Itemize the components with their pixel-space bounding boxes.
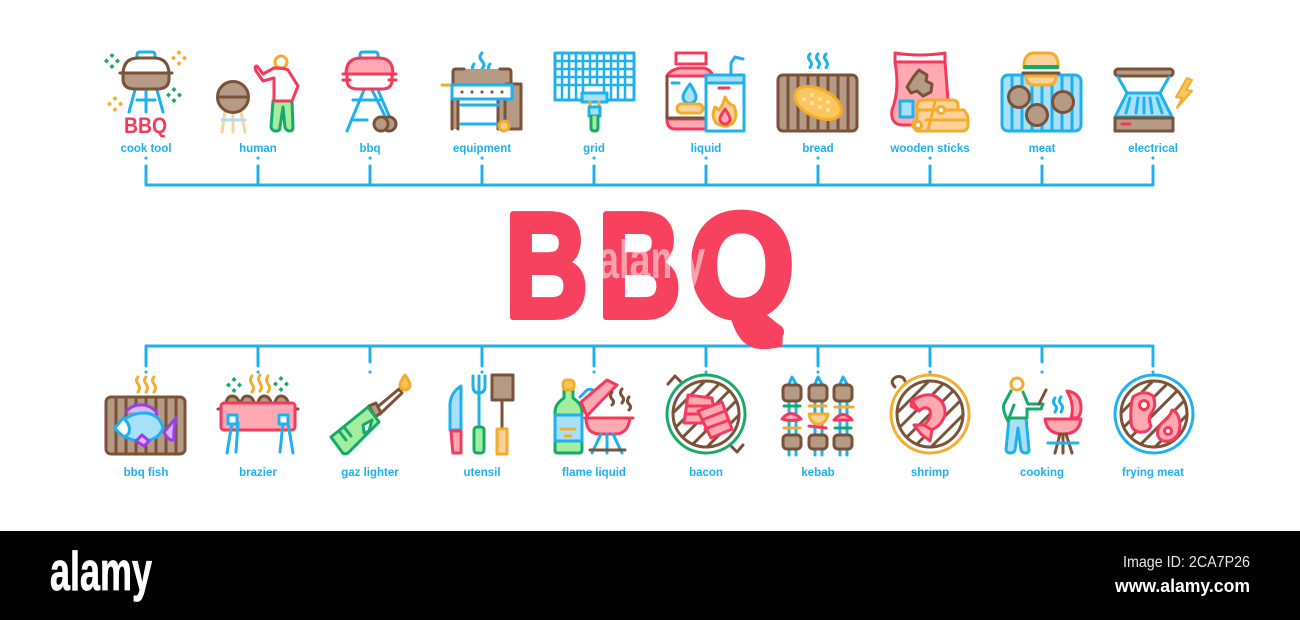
label: liquid: liquid: [691, 143, 721, 155]
item: cooking: [1004, 378, 1081, 479]
bottom connector tree: [146, 346, 1153, 372]
label: bbq: bbq: [359, 143, 381, 155]
label: grid: grid: [583, 143, 605, 155]
title: BBQ: Q: [689, 183, 794, 349]
label: utensil: utensil: [463, 467, 501, 479]
label: cooking: cooking: [1020, 467, 1064, 479]
icon: gas lighter: [331, 375, 410, 454]
item: bacon: [667, 375, 745, 479]
item: wooden sticks: [889, 53, 970, 155]
icon: bacon on round grill: [667, 375, 745, 453]
item: electrical: [1115, 69, 1192, 155]
label: electrical: electrical: [1128, 143, 1178, 155]
icon: steaks on round grill: [1115, 375, 1193, 453]
item: bbq: [343, 52, 396, 155]
item: flame liquid: [555, 380, 633, 479]
icon: wheeled kettle grill: [343, 52, 396, 131]
item: meat: [1002, 53, 1081, 155]
icon: burger and meatballs on grill: [1002, 53, 1081, 131]
icon: charcoal bag and logs: [892, 53, 968, 131]
footer bar: [0, 531, 1300, 620]
label: flame liquid: flame liquid: [562, 467, 626, 479]
website: www.alamy.com: [1114, 576, 1250, 596]
footer logo: alamy: [50, 540, 152, 602]
label: frying meat: frying meat: [1122, 467, 1184, 479]
label: bacon: bacon: [689, 467, 723, 479]
icon: electric contact grill: [1115, 69, 1192, 131]
icon: brazier with skewers: [218, 375, 298, 453]
label: meat: meat: [1029, 143, 1056, 155]
item: bbq fish: [106, 377, 185, 479]
item: frying meat: [1115, 375, 1193, 479]
icon: bottle and open grill: [555, 380, 633, 453]
image id: Image ID: 2CA7P26: [1123, 554, 1250, 571]
label: bread: bread: [802, 143, 834, 155]
item: human: [218, 56, 298, 155]
item: grid: [555, 53, 634, 155]
top connector tree: [146, 158, 1153, 185]
item: bread: [778, 54, 857, 155]
title: BBQ: B: [598, 184, 681, 349]
label: human: human: [239, 143, 277, 155]
icon: person cooking at grill: [1004, 378, 1081, 453]
watermark over title: alamy: [598, 229, 705, 290]
item: cook tool: [104, 50, 187, 155]
icon: charcoal grill with sparkles: BBQ: [124, 113, 167, 138]
item: gaz lighter: [331, 375, 410, 479]
icon: shrimp on round grill: [891, 375, 969, 453]
icon: person beside kettle grill: [218, 56, 298, 132]
icon: grill grate with handle: [555, 53, 634, 131]
label: wooden sticks: wooden sticks: [889, 143, 970, 155]
item: shrimp: [891, 375, 969, 479]
label: shrimp: shrimp: [911, 467, 949, 479]
icon: lighter fluid jar and box: [667, 53, 744, 131]
label: gaz lighter: gaz lighter: [341, 467, 399, 479]
icon: bread on grill with steam: [778, 54, 857, 131]
label: brazier: brazier: [239, 467, 277, 479]
label: equipment: equipment: [453, 143, 511, 155]
icon: knife, fork and spatula: [450, 375, 513, 454]
icon: three kebab skewers: [782, 377, 853, 455]
label: bbq fish: bbq fish: [124, 467, 168, 479]
item: kebab: [782, 377, 853, 479]
item: utensil: [450, 375, 513, 479]
title: BBQ: [505, 183, 794, 349]
item: equipment: [442, 53, 521, 155]
label: kebab: kebab: [801, 467, 835, 479]
item: brazier: [218, 375, 298, 479]
icon: gas grill station: [442, 53, 521, 131]
item: liquid: [667, 53, 744, 155]
icon: fish on grill with steam: [106, 377, 185, 454]
label: cook tool: cook tool: [120, 143, 172, 155]
title: BBQ: B: [505, 184, 588, 349]
